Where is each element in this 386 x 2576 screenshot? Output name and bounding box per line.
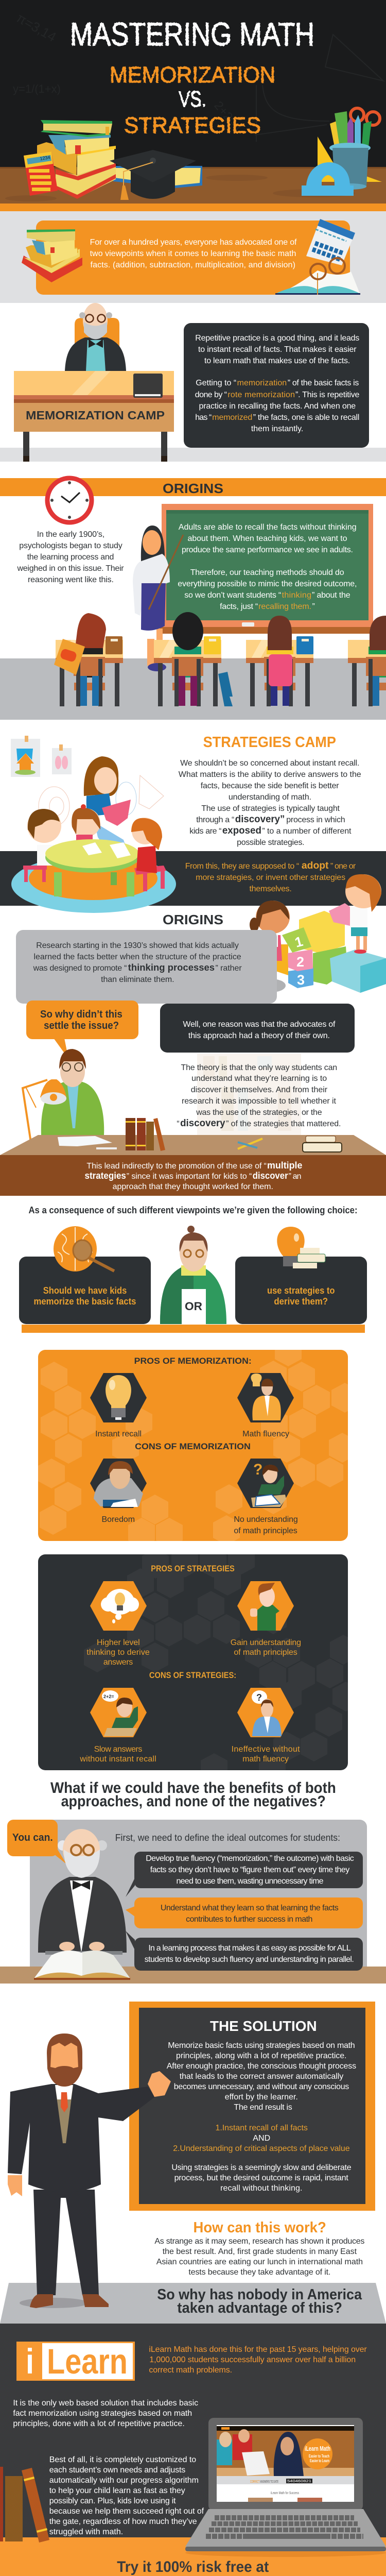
orange callout: so why bbox=[26, 1001, 138, 1059]
icon: graduation cap bbox=[110, 150, 196, 200]
icon: math fluency hex bbox=[237, 1373, 294, 1422]
theory text: The theory is that the only way students can bbox=[181, 1063, 337, 1072]
origins intro text bbox=[16, 530, 124, 584]
iLearn description text: principles, done with a lot of repetitive practice. bbox=[13, 2419, 185, 2428]
label: math fluency: Math fluency bbox=[242, 1430, 289, 1438]
icon: light bulb hex bbox=[90, 1373, 147, 1422]
intro text: facts. (addition, subtraction, multiplication, and division) bbox=[91, 261, 295, 269]
best of all text: automatically with our progress algorithm bbox=[49, 2476, 199, 2485]
iLearn description text: It is the only web based solution that includes basic bbox=[13, 2399, 198, 2408]
best of all text: possibly can. Plus, kids love using it bbox=[49, 2497, 176, 2505]
website screenshot: iLearn Math for Success bbox=[271, 2492, 299, 2495]
dark band: adopt strategies: more strategies, or invent other strategies bbox=[196, 873, 345, 882]
outcome bubble 1: need to use them, wasting unnecessary time bbox=[176, 1877, 324, 1886]
best of all text: each student’s own needs and adjusts bbox=[49, 2466, 185, 2475]
outcome bubble 3: In a learning process that makes it as easy as possible for ALL bbox=[148, 1944, 351, 1953]
iLearn logo: Learn bbox=[47, 2342, 128, 2381]
label: memorization camp: MEMORIZATION CAMP bbox=[26, 409, 165, 422]
orange callout: so why: So why didn’t this bbox=[40, 1009, 122, 1020]
teacher with pointer bbox=[133, 526, 183, 671]
strategies camp text: possible strategies. bbox=[237, 838, 305, 847]
old professor with open book bbox=[34, 1829, 130, 1980]
gray research panel: Research starting in the 1930’s showed that kids actually bbox=[36, 941, 239, 950]
website screenshot: 540460821 bbox=[287, 2480, 311, 2483]
outcome bubble 3 bbox=[126, 1931, 363, 1971]
header panel: chalkboard and table bbox=[0, 0, 386, 211]
labels: cons of strategies: Slow answers bbox=[94, 1745, 142, 1754]
strategies camp heading: STRATEGIES CAMP bbox=[203, 734, 336, 751]
orange callout: so why: settle the issue? bbox=[44, 1020, 119, 1031]
outcome bubble 2: contributes to further success in math bbox=[186, 1915, 312, 1924]
origins heading band bbox=[0, 478, 386, 496]
chalkboard text: Adults are able to recall the facts without thinking bbox=[179, 523, 357, 532]
strategies camp text: discovery” bbox=[235, 814, 285, 825]
gray research panel bbox=[16, 930, 277, 1004]
chalkboard text: ” bbox=[312, 602, 315, 611]
label: instant recall: Instant recall bbox=[95, 1430, 142, 1438]
iLearn achievement text bbox=[149, 2345, 367, 2375]
origins intro text: the learning process and bbox=[27, 553, 114, 562]
dark panel: a theory of their own bbox=[160, 1004, 355, 1053]
icon: closed book on desk bbox=[133, 374, 163, 398]
chalkboard text: produce the same performance we see in adults. bbox=[182, 546, 353, 554]
labels: cons of strategies bbox=[79, 1745, 300, 1764]
how can this work: tests because they take advantage of it. bbox=[188, 2268, 330, 2277]
solution text: that leads to the correct answer automatically bbox=[180, 2072, 343, 2081]
theory text: discover it themselves. And from their bbox=[191, 1086, 328, 1094]
strategies camp text: ” to a number of different bbox=[262, 827, 352, 836]
chalkboard text: about them. When teaching kids, we want to bbox=[187, 534, 347, 543]
orange callout: you can bbox=[7, 1820, 66, 1864]
dark band: adopt strategies: adopt bbox=[302, 860, 329, 871]
dark panel: a theory of their own: this approach had a theory of their own. bbox=[188, 1031, 330, 1040]
intro panel bbox=[0, 211, 386, 303]
iLearn description text: fact memorization using strategies based on math bbox=[13, 2409, 192, 2418]
memorization text panel: them instantly. bbox=[251, 425, 303, 433]
icon: puzzled student hex bbox=[237, 1688, 294, 1737]
chalk formulas background: y=1/(1+x) bbox=[13, 82, 61, 95]
illustration: children with blocks bbox=[250, 874, 386, 993]
student 2 bbox=[154, 612, 233, 706]
student 3 bbox=[246, 616, 313, 706]
icon: thought cloud hex bbox=[90, 1581, 147, 1631]
chalkboard text: Therefore, our teaching methods should do bbox=[190, 568, 344, 577]
best of all text: struggled with math. bbox=[49, 2528, 123, 2536]
labels: cons of strategies: math fluency bbox=[242, 1755, 289, 1764]
person holding OR sign: OR bbox=[185, 1300, 202, 1313]
keyboard bbox=[206, 2518, 363, 2536]
solution text: 2.Understanding of critical aspects of place value bbox=[173, 2144, 350, 2153]
chalkboard text: everything possible to mimic the desired outcome, bbox=[178, 580, 357, 588]
origins intro text: In the early 1900’s, bbox=[37, 530, 104, 539]
website screenshot: Easier to Learn bbox=[310, 2459, 329, 2463]
strategies camp text: What matters is the ability to derive answers to the bbox=[179, 770, 361, 779]
dark band: adopt strategies bbox=[0, 851, 386, 906]
gray research panel: ” rather bbox=[215, 964, 242, 973]
choice panel: strategies bbox=[235, 1227, 367, 1324]
classroom floor bbox=[0, 658, 386, 720]
strategies camp text: We shouldn’t be so concerned about instant recall. bbox=[180, 759, 359, 768]
icon: puzzled student hex: ? bbox=[256, 1692, 262, 1703]
question heading: what if bbox=[50, 1780, 336, 1810]
iLearn logo bbox=[16, 2342, 135, 2381]
presenter in suit bbox=[8, 2033, 171, 2308]
labels: pros of strategies bbox=[86, 1638, 301, 1667]
solution text: The end result is bbox=[234, 2103, 292, 2112]
iLearn dark panel bbox=[0, 2324, 386, 2537]
classroom chalkboard bbox=[160, 504, 373, 634]
question heading: why nobody: taken advantage of this? bbox=[177, 2300, 342, 2316]
orange shelf bar bbox=[22, 1325, 365, 1333]
solution text: AND bbox=[253, 2134, 270, 2143]
chalkboard text: facts, just “ bbox=[220, 602, 258, 611]
theory text: understand what they’re learning is to bbox=[191, 1074, 327, 1083]
labels: pros of strategies: Gain understanding bbox=[231, 1638, 301, 1647]
title: MASTERING MATH bbox=[70, 16, 314, 53]
question heading: why nobody bbox=[157, 2286, 362, 2316]
intro text: For over a hundred years, everyone has advocated one of bbox=[90, 238, 297, 247]
icon: student with 2+2 thought hex bbox=[90, 1688, 147, 1737]
outcome bubble 1: Develop true fluency (“memorization,” the outcome) with basic bbox=[146, 1854, 354, 1863]
orange callout: you can: You can. bbox=[12, 1832, 53, 1843]
origins intro text: psychologists began to study bbox=[19, 541, 122, 550]
solution text: process, but the desired outcome is rapid, instant bbox=[174, 2174, 348, 2182]
laptop with iLearn website bbox=[185, 2418, 386, 2557]
icon: thumbs up student hex bbox=[237, 1581, 294, 1631]
icon: open book bbox=[34, 1951, 130, 1980]
icon: stack of books bbox=[37, 120, 202, 199]
labels: cons of memorization: Boredom bbox=[102, 1515, 135, 1524]
memorization text panel: practice in recalling the facts. And when one bbox=[199, 402, 356, 411]
gray research panel: thinking processes bbox=[128, 962, 215, 973]
desk with band text: ” since it was important for kids to “ bbox=[127, 1172, 252, 1181]
choice panel: strategies: derive them? bbox=[274, 1296, 328, 1307]
outcome bubble 1: facts so they don’t have to “figure them out” every time they bbox=[150, 1866, 349, 1874]
iLearn logo: i bbox=[26, 2342, 34, 2381]
website screenshot: CORRECT ANSWERS TO DATE bbox=[250, 2480, 278, 2484]
person holding OR sign bbox=[160, 1226, 226, 1324]
chalk formulas background: 2+2=4 bbox=[211, 99, 244, 134]
chalkboard text: ” about the bbox=[312, 591, 350, 600]
gray floor band under memorization camp bbox=[0, 448, 386, 462]
labels: cons of memorization bbox=[102, 1515, 298, 1535]
best of all text: to help your child learn as fast as they bbox=[49, 2486, 185, 2495]
strategies camp text: kids are “ bbox=[189, 827, 221, 836]
memorization text panel: rote memorization bbox=[227, 391, 295, 399]
best of all text: the gate, regardless of how much they’ve bbox=[49, 2517, 197, 2526]
iLearn description text bbox=[13, 2399, 198, 2428]
icon: confused student hex: ? bbox=[253, 1461, 262, 1478]
ideal outcomes intro: First, we need to define the ideal outcomes for students: bbox=[115, 1832, 340, 1843]
intro text bbox=[90, 238, 297, 269]
dark panel: a theory of their own: Well, one reason was that the advocates of bbox=[183, 1020, 336, 1029]
memorization text panel: done by “ bbox=[195, 391, 227, 399]
icon: butterfly drawing bbox=[52, 744, 72, 774]
girl bbox=[250, 901, 290, 984]
solution text: Using strategies is a seemingly slow and deliberate bbox=[171, 2163, 352, 2172]
solution chalkboard bbox=[129, 2002, 375, 2211]
icon: desk lamp bbox=[21, 1079, 66, 1151]
memorization text panel: has “ bbox=[195, 413, 212, 422]
chalk formulas background bbox=[13, 10, 383, 142]
dark band: adopt strategies: themselves. bbox=[249, 885, 292, 893]
origins heading band: ORIGINS bbox=[163, 481, 223, 496]
website screenshot: iLearn Math bbox=[305, 2445, 330, 2452]
theory text: research it was impossible to tell whether it bbox=[182, 1097, 336, 1106]
call to action: Try it 100% risk free at bbox=[117, 2558, 269, 2575]
icon: calculator bbox=[24, 151, 58, 196]
title: STRATEGIES bbox=[124, 113, 261, 138]
solution text: becomes unnecessary, and without any conscious bbox=[174, 2082, 349, 2091]
pros and cons of strategies panel bbox=[38, 1554, 348, 1770]
dark band: adopt strategies: ” one or bbox=[330, 862, 356, 871]
girl with ponytail bbox=[72, 804, 100, 848]
origins intro text: weighed in on this issue. Their bbox=[16, 564, 124, 573]
gray floor bbox=[0, 2283, 386, 2324]
labels: pros of strategies: Higher level bbox=[97, 1638, 140, 1647]
strategies camp text: facts, because the side benefit is better bbox=[201, 782, 339, 790]
labels: pros of strategies: thinking to derive bbox=[86, 1648, 150, 1657]
icon: student with 2+2 thought hex: 2+2= bbox=[103, 1694, 114, 1699]
icon: pencil cup with tools bbox=[302, 108, 382, 196]
strategies camp text: The use of strategies is typically taught bbox=[201, 804, 340, 813]
table top bbox=[45, 839, 139, 873]
desk with band text: ” an bbox=[289, 1172, 302, 1181]
solution text: After enough practice, the conscious thought process bbox=[167, 2062, 356, 2071]
labels: pros of strategies: answers bbox=[103, 1658, 133, 1667]
theory text: discovery bbox=[180, 1118, 225, 1129]
gray research panel: was designed to promote “ bbox=[33, 964, 127, 973]
desk with band text: approach that they thought worked for them. bbox=[113, 1182, 273, 1191]
icon: house drawing bbox=[11, 736, 40, 777]
choice heading: As a consequence of such different viewpoints we’re given the following choice: bbox=[29, 1205, 357, 1215]
choice panel: memorize: memorize the basic facts bbox=[34, 1296, 136, 1307]
girl with orange hair bbox=[131, 818, 162, 873]
labels: cons of strategies: without instant recall bbox=[79, 1755, 156, 1764]
pros and cons of memorization panel: CONS OF MEMORIZATION bbox=[135, 1442, 251, 1451]
icon: brain and magnifier bbox=[54, 1226, 114, 1272]
chalkboard text: so we don’t want students “ bbox=[184, 591, 281, 600]
solution text: 1.Instant recall of all facts bbox=[215, 2124, 308, 2132]
faded bookshelf bbox=[197, 1054, 301, 1135]
icon: clock bbox=[47, 478, 92, 522]
strategies camp text: process in which bbox=[286, 816, 345, 824]
chalkboard text bbox=[178, 523, 357, 611]
solution text: Memorize basic facts using strategies based on math bbox=[168, 2041, 355, 2050]
chalk formulas background: π=3,14 bbox=[14, 10, 59, 45]
pros and cons of memorization panel bbox=[38, 1350, 348, 1541]
iLearn achievement text: correct math problems. bbox=[149, 2366, 232, 2375]
how can this work bbox=[154, 2219, 364, 2277]
solution text: principles, along with a lot of repetitive practice. bbox=[176, 2052, 347, 2060]
labels: pros of strategies: of math principles bbox=[234, 1648, 297, 1657]
choice panel: memorize: Should we have kids bbox=[43, 1285, 127, 1296]
question heading: what if: What if we could have the benefits of both bbox=[50, 1780, 336, 1797]
question heading: why nobody: So why has nobody in America bbox=[157, 2286, 362, 2303]
chalkboard text: recalling them. bbox=[258, 602, 311, 611]
pros and cons of strategies panel: CONS OF STRATEGIES: bbox=[149, 1670, 236, 1680]
desk objects bbox=[58, 1118, 342, 1152]
pros and cons of strategies panel: PROS OF STRATEGIES bbox=[151, 1564, 235, 1573]
title: MEMORIZATION bbox=[110, 62, 275, 88]
how can this work: the best result. And, first grade students in many East bbox=[163, 2247, 357, 2256]
best of all text bbox=[49, 2455, 204, 2536]
iLearn achievement text: 1,000,000 students successfully answer over half a billion bbox=[149, 2355, 356, 2364]
chalkboard text: thinking bbox=[282, 591, 311, 600]
desk with band text: strategies bbox=[84, 1171, 126, 1181]
choice panel: strategies: use strategies to bbox=[267, 1285, 335, 1296]
gray research panel: than eliminate them. bbox=[101, 975, 174, 984]
solution text bbox=[167, 2041, 356, 2193]
gray research panel: learned the facts better when the structure of the practice bbox=[34, 953, 241, 961]
strategies camp text: understanding of math. bbox=[229, 793, 311, 802]
desk with band text: discover bbox=[253, 1171, 288, 1181]
illustration: teacher reading to kids at table bbox=[11, 736, 176, 913]
intro text: two viewpoints when it comes to learning the basic math bbox=[90, 249, 296, 258]
labels: cons of memorization: No understanding bbox=[234, 1515, 298, 1524]
orange footer band bbox=[0, 2537, 386, 2576]
icon: confused student hex bbox=[237, 1459, 294, 1508]
strategies camp text bbox=[179, 759, 361, 847]
memorization text panel: Repetitive practice is a good thing, and it leads bbox=[195, 334, 359, 343]
iLearn achievement text: iLearn Math has done this for the past 15 years, helping over bbox=[149, 2345, 367, 2354]
labels: cons of strategies: Ineffective without bbox=[232, 1745, 300, 1754]
title bbox=[70, 16, 314, 138]
blocks: 1 bbox=[293, 934, 305, 951]
table band bbox=[0, 1967, 386, 1984]
icon: books on shelf bbox=[0, 2467, 49, 2543]
icon: bored student hex bbox=[90, 1459, 147, 1508]
icon: calculator: 1234 bbox=[40, 155, 50, 161]
best of all text: Best of all, it is completely customized to bbox=[49, 2455, 196, 2464]
outcome bubble 2 bbox=[126, 1897, 363, 1928]
desk with band text bbox=[0, 1118, 386, 1196]
memorization text panel: memorized bbox=[212, 413, 252, 422]
labels: cons of memorization: of math principles bbox=[234, 1527, 297, 1535]
pros and cons of memorization panel: PROS OF MEMORIZATION: bbox=[134, 1356, 252, 1366]
solution text: effort by the learner. bbox=[225, 2093, 298, 2102]
boy bbox=[27, 809, 61, 866]
man with glasses and lamp at desk bbox=[21, 1049, 104, 1151]
outcome bubble 1 bbox=[126, 1852, 363, 1897]
how can this work: Asian countries are eating our lunch in international math bbox=[156, 2258, 363, 2266]
memorization text panel: Getting to “ bbox=[196, 379, 236, 387]
blocks bbox=[282, 903, 386, 993]
origins intro text: reasoning went like this. bbox=[28, 575, 114, 584]
icon: books bbox=[22, 229, 82, 282]
memorization camp: teacher at desk bbox=[14, 303, 174, 462]
blocks: 2 bbox=[296, 954, 304, 970]
question heading: what if: approaches, and none of the negatives? bbox=[61, 1793, 326, 1810]
memorization text panel bbox=[184, 323, 369, 448]
memorization text panel: ” of the basic facts is bbox=[288, 379, 359, 387]
website screenshot bbox=[217, 2425, 354, 2502]
memorization text panel: memorization bbox=[237, 379, 287, 387]
theory text: “ bbox=[177, 1120, 180, 1128]
outcome bubble 3: students to develop such fluency and understanding in parallel. bbox=[145, 1955, 354, 1964]
solution heading: THE SOLUTION bbox=[210, 2018, 317, 2034]
dark band: adopt strategies: From this, they are supposed to “ bbox=[185, 862, 299, 871]
memorization text panel: to instant recall of facts. That makes it easier bbox=[198, 345, 357, 354]
strategies camp text: exposed bbox=[222, 825, 261, 836]
theory text: was the use of the strategies, or the bbox=[196, 1108, 322, 1117]
memorization text panel: ”. This is repetitive bbox=[295, 391, 359, 399]
theory text: ” of the strategies that mattered. bbox=[226, 1120, 341, 1128]
memorization text panel: ” the facts, one is able to recall bbox=[253, 413, 359, 422]
theory text bbox=[177, 1063, 341, 1129]
solution text: recall without thinking. bbox=[220, 2184, 302, 2193]
icon: calculator and open book with glasses bbox=[275, 219, 360, 295]
desk with band text: This lead indirectly to the promotion of the use of “ bbox=[86, 1162, 267, 1171]
boy bbox=[345, 874, 381, 954]
how can this work: As strange as it may seem, research has shown it produces bbox=[154, 2237, 364, 2246]
best of all text: because we help them succeed right out of bbox=[49, 2507, 204, 2516]
icon: bulb and books bbox=[277, 1227, 325, 1268]
memorization text panel: to learn math that makes use of the facts. bbox=[204, 357, 350, 365]
blocks: 3 bbox=[297, 972, 305, 988]
title: VS. bbox=[179, 87, 206, 112]
desk with band text: multiple bbox=[267, 1160, 302, 1171]
how can this work: How can this work? bbox=[194, 2219, 326, 2236]
choice panel: memorize bbox=[19, 1226, 151, 1324]
gray ideal outcomes panel bbox=[30, 1820, 367, 1974]
origins heading 2: ORIGINS bbox=[163, 912, 223, 927]
strategies camp text: through a “ bbox=[196, 816, 234, 824]
website screenshot: Easier to Teach bbox=[309, 2454, 329, 2459]
outcome bubble 2: Understand what they learn so that learning the facts bbox=[161, 1904, 339, 1912]
student 1 bbox=[54, 613, 123, 706]
student 4 bbox=[348, 616, 386, 706]
